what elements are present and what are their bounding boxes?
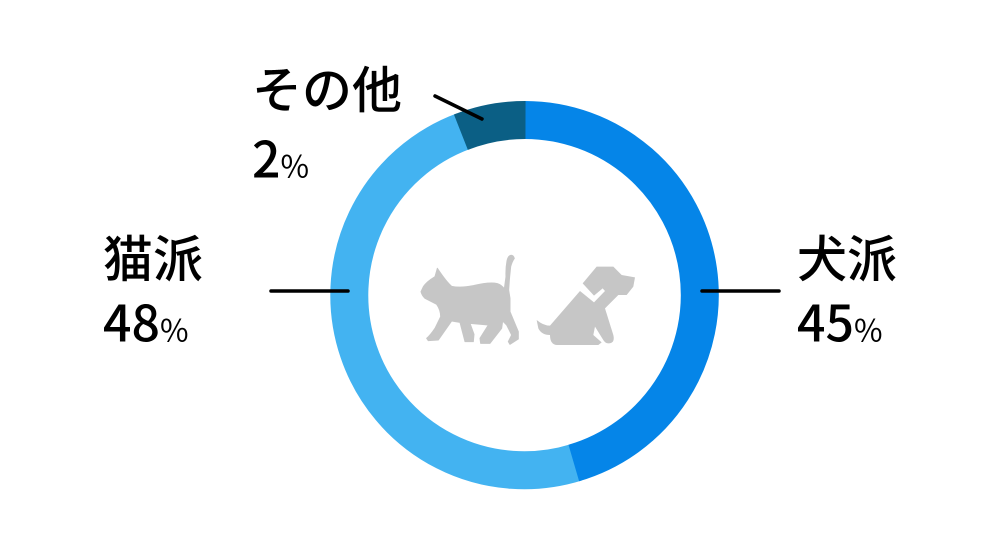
label: cat: 猫派 [103,220,203,292]
donut chart [349,120,700,470]
leader line: cat [271,289,348,293]
segment: other 2% [461,120,526,132]
label: other [252,51,402,192]
icon: cat [421,255,518,344]
label: dog: 45% [797,284,883,356]
label: other: 2% [252,120,309,192]
label: cat [103,220,203,356]
label: cat: 48% [103,284,189,356]
segment: cat 48% [349,131,576,470]
leader line: other [435,96,482,119]
segment: dog 45% [525,120,700,463]
icon: dog [537,267,635,345]
label: other: その他 [252,51,402,123]
label: dog [797,220,897,356]
label: dog: 犬派 [797,220,897,292]
leader line: dog [702,289,779,293]
